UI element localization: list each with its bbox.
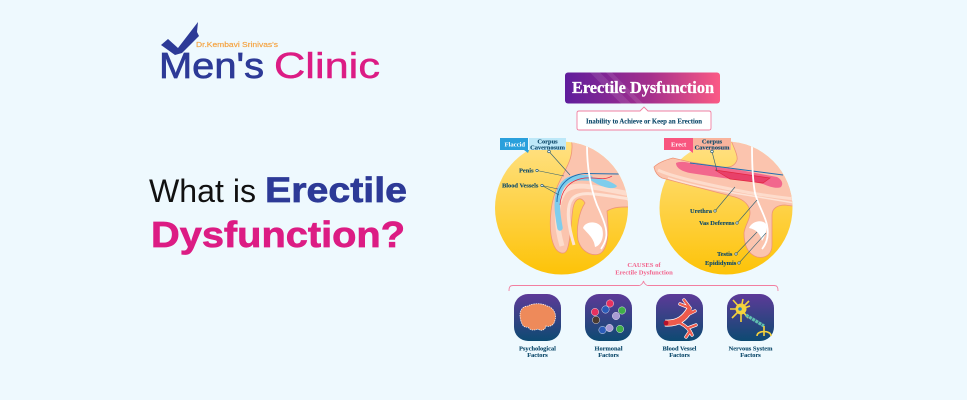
title banner: Erectile Dysfunction — [572, 78, 714, 97]
label: Urethra: Urethra — [690, 208, 713, 215]
label: Hormonal — [594, 346, 623, 352]
label: Flaccid: Flaccid — [504, 142, 525, 148]
subtitle box — [577, 107, 711, 130]
panel: blood vessel factors: Factors — [669, 352, 690, 359]
bracket — [509, 281, 778, 291]
panel: blood vessel factors — [656, 294, 703, 359]
icon: brain — [514, 294, 561, 341]
label: Erect: Erect — [671, 142, 687, 148]
panel: nervous system factors — [727, 294, 774, 359]
label: Corpus Cavernosum: Corpus — [702, 138, 723, 146]
panel: erect diagram — [654, 138, 800, 274]
label: Nervous System — [729, 346, 773, 352]
label: Blood Vessels: Blood Vessels — [502, 182, 539, 190]
heading — [149, 171, 407, 255]
heading emphasis: Erectile: Erectile — [265, 171, 407, 210]
label: Urethra — [690, 187, 735, 215]
logo wordmark: Men's: Men's — [159, 45, 264, 86]
label: Erect — [664, 138, 693, 153]
label: Corpus Cavernosum: Cavernosum — [530, 144, 566, 152]
heading emphasis: Dysfunction: Dysfunction? — [151, 214, 405, 255]
panel: psychological factors — [514, 294, 561, 359]
icon: check mark — [161, 22, 199, 55]
causes heading — [615, 262, 673, 276]
causes heading: Erectile Dysfunction — [615, 270, 673, 276]
logo tagline: Dr.Kembavi Srinivas's — [196, 40, 278, 49]
title banner — [565, 72, 720, 104]
anatomy: flaccid penis and scrotum — [550, 138, 634, 255]
heading line one: What is — [149, 173, 256, 209]
logo wordmark: Clinic: Clinic — [274, 45, 380, 86]
panel: hormonal factors: Factors — [598, 352, 619, 359]
subtitle box: Inability to Achieve or Keep an Erection — [586, 118, 702, 126]
icon: neuron — [727, 294, 774, 341]
label: Blood Vessel — [663, 346, 697, 352]
panel: hormonal factors — [585, 294, 632, 359]
icon: blood vessel — [656, 294, 703, 341]
anatomy: erect penis and scrotum — [654, 138, 800, 257]
label: Epididymis — [705, 233, 766, 267]
label: Testis — [717, 232, 757, 258]
panel: flaccid diagram — [495, 138, 634, 274]
panel: psychological factors: Factors — [527, 352, 548, 359]
icon: hormone molecules — [585, 294, 632, 341]
label: Testis: Testis — [717, 251, 733, 258]
label: Vas Deferens: Vas Deferens — [699, 220, 735, 227]
label: Corpus Cavernosum — [693, 138, 731, 171]
label: Corpus Cavernosum — [529, 138, 570, 175]
logo — [159, 22, 380, 86]
causes heading: CAUSES of — [627, 262, 661, 269]
label: Epididymis: Epididymis — [705, 260, 737, 267]
label: Vas Deferens — [699, 200, 757, 227]
label: Penis: Penis — [519, 168, 534, 174]
label: Corpus Cavernosum: Corpus — [537, 138, 558, 146]
label: Psychological — [519, 346, 556, 352]
label: Corpus Cavernosum: Cavernosum — [695, 144, 730, 152]
panel: nervous system factors: Factors — [740, 352, 761, 359]
